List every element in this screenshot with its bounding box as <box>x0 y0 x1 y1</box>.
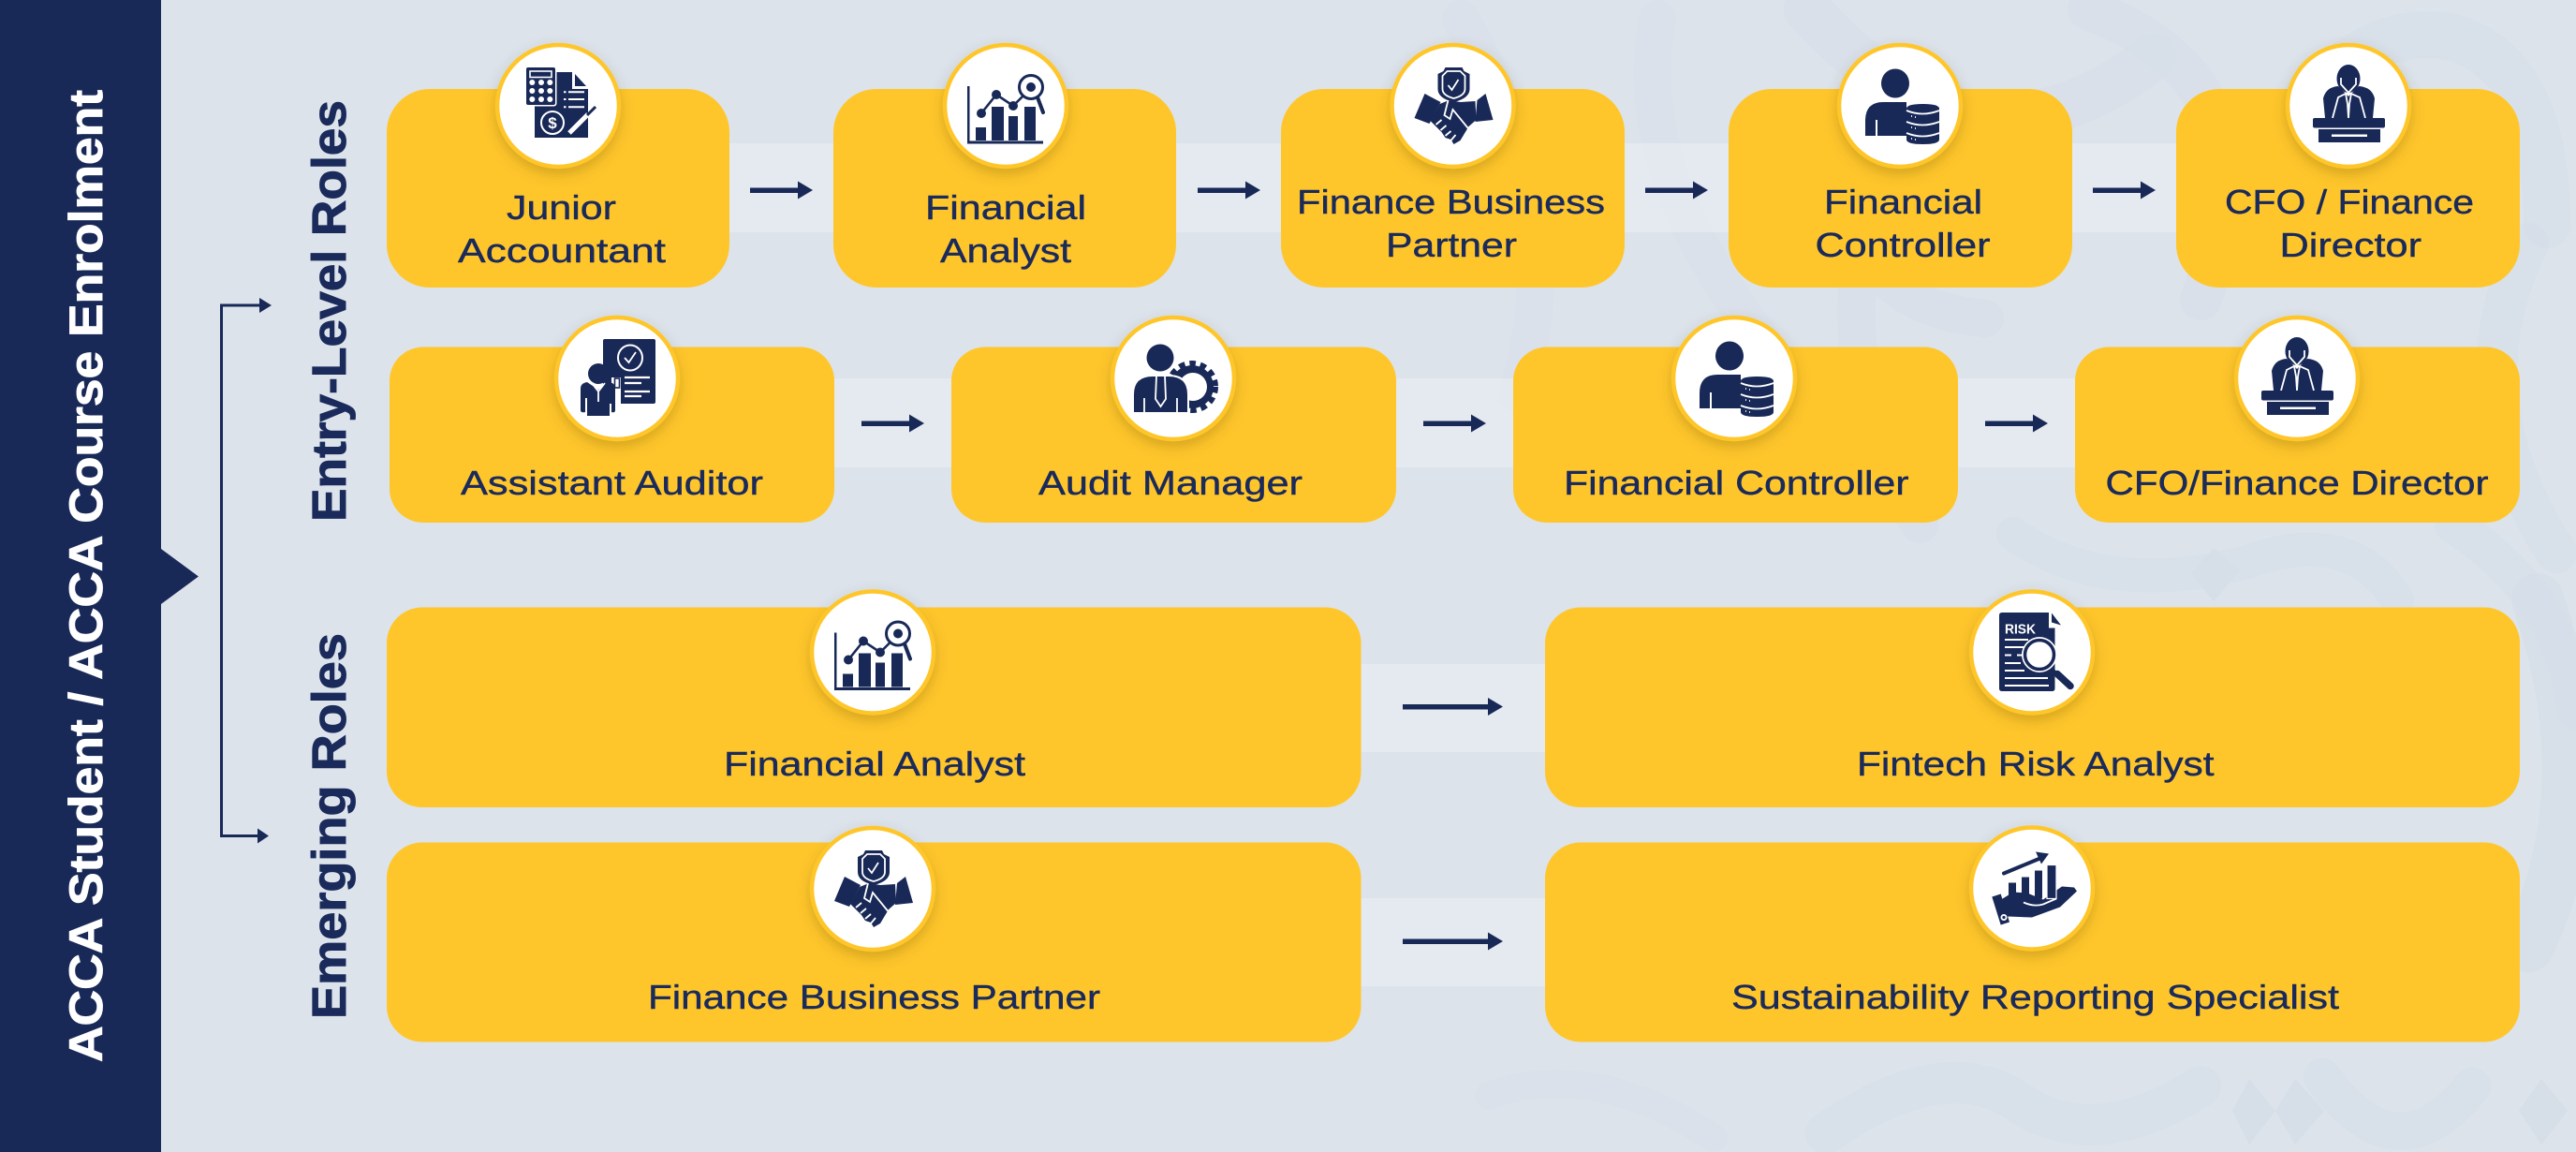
label: Accountant <box>458 231 666 270</box>
label: Junior <box>507 188 616 227</box>
connector band row 1 <box>729 143 2176 232</box>
label <box>2225 183 2474 264</box>
label: Analyst <box>940 231 1071 270</box>
arrow: row 3 <box>1403 698 1503 716</box>
connector band row 3 <box>1361 664 1545 752</box>
sidebar <box>0 0 199 1152</box>
background arabesque pattern <box>1461 9 2576 1138</box>
label: Audit Manager <box>1038 464 1303 502</box>
label: Director <box>2279 226 2421 264</box>
label <box>458 188 666 270</box>
label: Finance Business Partner <box>648 978 1100 1016</box>
icon: calculator and invoice <box>497 45 619 167</box>
label: Financial Controller <box>1564 464 1909 502</box>
icon: risk document with magnifier: RISK <box>2005 622 2036 637</box>
arrow: row 1 step 2 <box>1198 182 1260 199</box>
card: Financial Controller (audit track) <box>1513 318 1958 523</box>
card: Junior Accountant <box>387 45 729 288</box>
icon: handshake with shield <box>812 828 934 950</box>
label: Assistant Auditor <box>461 464 763 502</box>
connector band row 4 <box>1361 898 1545 986</box>
arrow: row 1 step 1 <box>750 182 813 199</box>
label: Controller <box>1815 226 1991 264</box>
label: Partner <box>1386 226 1517 264</box>
card: CFO/Finance Director (audit track) <box>2075 318 2520 523</box>
heading: Entry-Level Roles: Entry-Level Roles <box>302 100 356 522</box>
card: Assistant Auditor <box>390 318 834 523</box>
card: CFO / Finance Director <box>2176 45 2520 288</box>
icon: analytics chart <box>812 592 934 714</box>
card: Finance Business Partner (emerging) <box>387 828 1362 1041</box>
label: Finance Business <box>1297 183 1605 221</box>
icon: manager with gear <box>1112 318 1234 439</box>
icon: analytics chart <box>945 45 1067 167</box>
background diamonds <box>2191 548 2568 1145</box>
arrow: row 1 step 3 <box>1645 182 1708 199</box>
arrow: row 2 step 3 <box>1985 414 2048 433</box>
card: Fintech Risk Analyst <box>1545 592 2520 807</box>
label: CFO / Finance <box>2225 183 2474 221</box>
branching bracket arrow <box>220 298 272 843</box>
card: Financial Analyst (emerging) <box>387 592 1362 807</box>
icon: handshake with shield <box>1391 45 1513 167</box>
label: Financial <box>1824 183 1982 221</box>
icon: person with database <box>1839 45 1961 167</box>
label <box>1815 183 1991 264</box>
icon: hand holding growth chart <box>1971 828 2093 950</box>
arrow: row 1 step 4 <box>2093 182 2156 199</box>
arrow: row 2 step 2 <box>1423 414 1486 433</box>
label: Sustainability Reporting Specialist <box>1731 978 2339 1016</box>
label <box>1297 183 1605 264</box>
card: Sustainability Reporting Specialist <box>1545 828 2520 1041</box>
card: Finance Business Partner <box>1281 45 1625 288</box>
label: Fintech Risk Analyst <box>1857 745 2214 783</box>
icon: executive at podium <box>2288 45 2409 167</box>
card: Financial Controller <box>1729 45 2072 288</box>
icon: calculator and invoice: $ <box>548 114 557 132</box>
icon: risk document with magnifier <box>1971 592 2093 714</box>
label: Financial <box>925 188 1086 227</box>
label: CFO/Finance Director <box>2105 464 2489 502</box>
arrow: row 2 step 1 <box>861 414 924 433</box>
sidebar title: ACCA Student / ACCA Course Enrolment <box>60 90 112 1062</box>
icon: person with database <box>1673 318 1795 439</box>
label: Financial Analyst <box>724 745 1025 783</box>
connector band row 2 <box>834 378 2075 467</box>
heading: Emerging Roles: Emerging Roles <box>302 633 356 1019</box>
arrow: row 4 <box>1403 933 1503 950</box>
card: Financial Analyst <box>833 45 1176 288</box>
icon: executive at podium <box>2236 318 2358 439</box>
icon: auditor with checklist <box>556 318 678 439</box>
card: Audit Manager <box>951 318 1396 523</box>
label <box>925 188 1086 270</box>
